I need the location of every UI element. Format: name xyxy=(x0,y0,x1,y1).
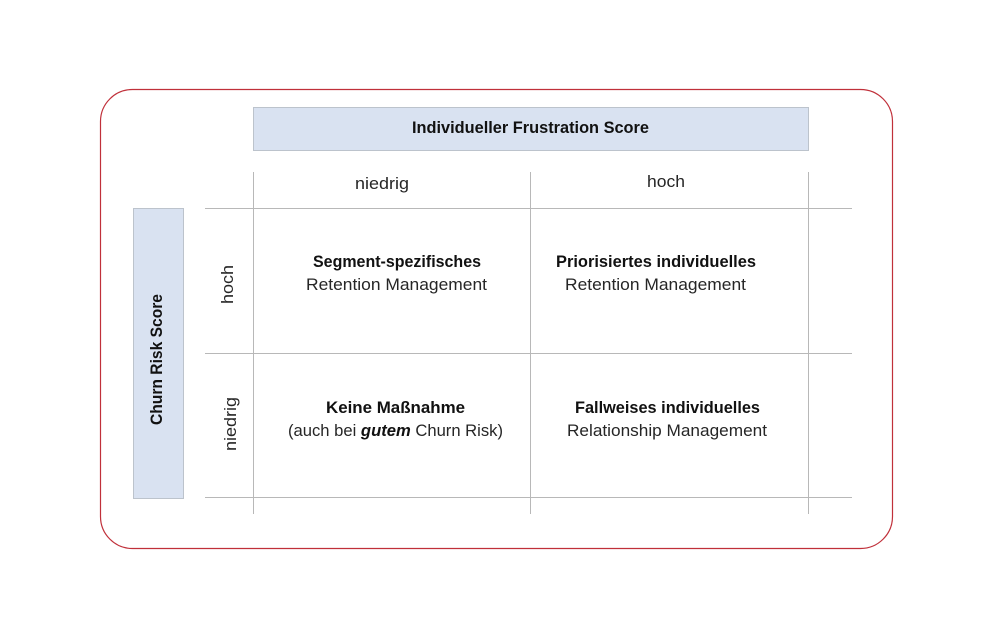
cell: low churn, low frustration: Keine Maßnahme xyxy=(326,399,465,417)
heading: Individueller Frustration Score xyxy=(254,108,808,150)
cell: high churn, low frustration: Retention Management xyxy=(306,276,487,294)
heading: Churn Risk Score: Churn Risk Score xyxy=(148,294,166,425)
cell: low churn, high frustration xyxy=(567,399,767,440)
cell: high churn, high frustration: Retention Management xyxy=(565,276,746,294)
cell: high churn, low frustration xyxy=(306,253,487,294)
row label: hoch: hoch xyxy=(219,265,237,304)
cell: high churn, low frustration: Segment-spezifisches xyxy=(313,253,481,271)
heading: Individueller Frustration Score: Individueller Frustration Score xyxy=(412,119,649,137)
cell: high churn, high frustration: Priorisiertes individuelles xyxy=(556,253,756,271)
heading: Churn Risk Score xyxy=(134,208,184,498)
row label: niedrig: niedrig xyxy=(222,397,240,451)
outer red rounded frame xyxy=(100,90,892,548)
cell: low churn, high frustration: Relationship Management xyxy=(567,422,767,440)
column label: niedrig: niedrig xyxy=(355,175,409,193)
cell: high churn, high frustration xyxy=(556,253,756,294)
cell: low churn, high frustration: Fallweises individuelles xyxy=(575,399,760,417)
column label: hoch: hoch xyxy=(647,173,685,191)
matrix grid lines xyxy=(205,172,852,514)
cell: low churn, low frustration xyxy=(288,399,503,440)
cell: low churn, low frustration: (auch bei gutem Churn Risk) xyxy=(288,422,503,440)
